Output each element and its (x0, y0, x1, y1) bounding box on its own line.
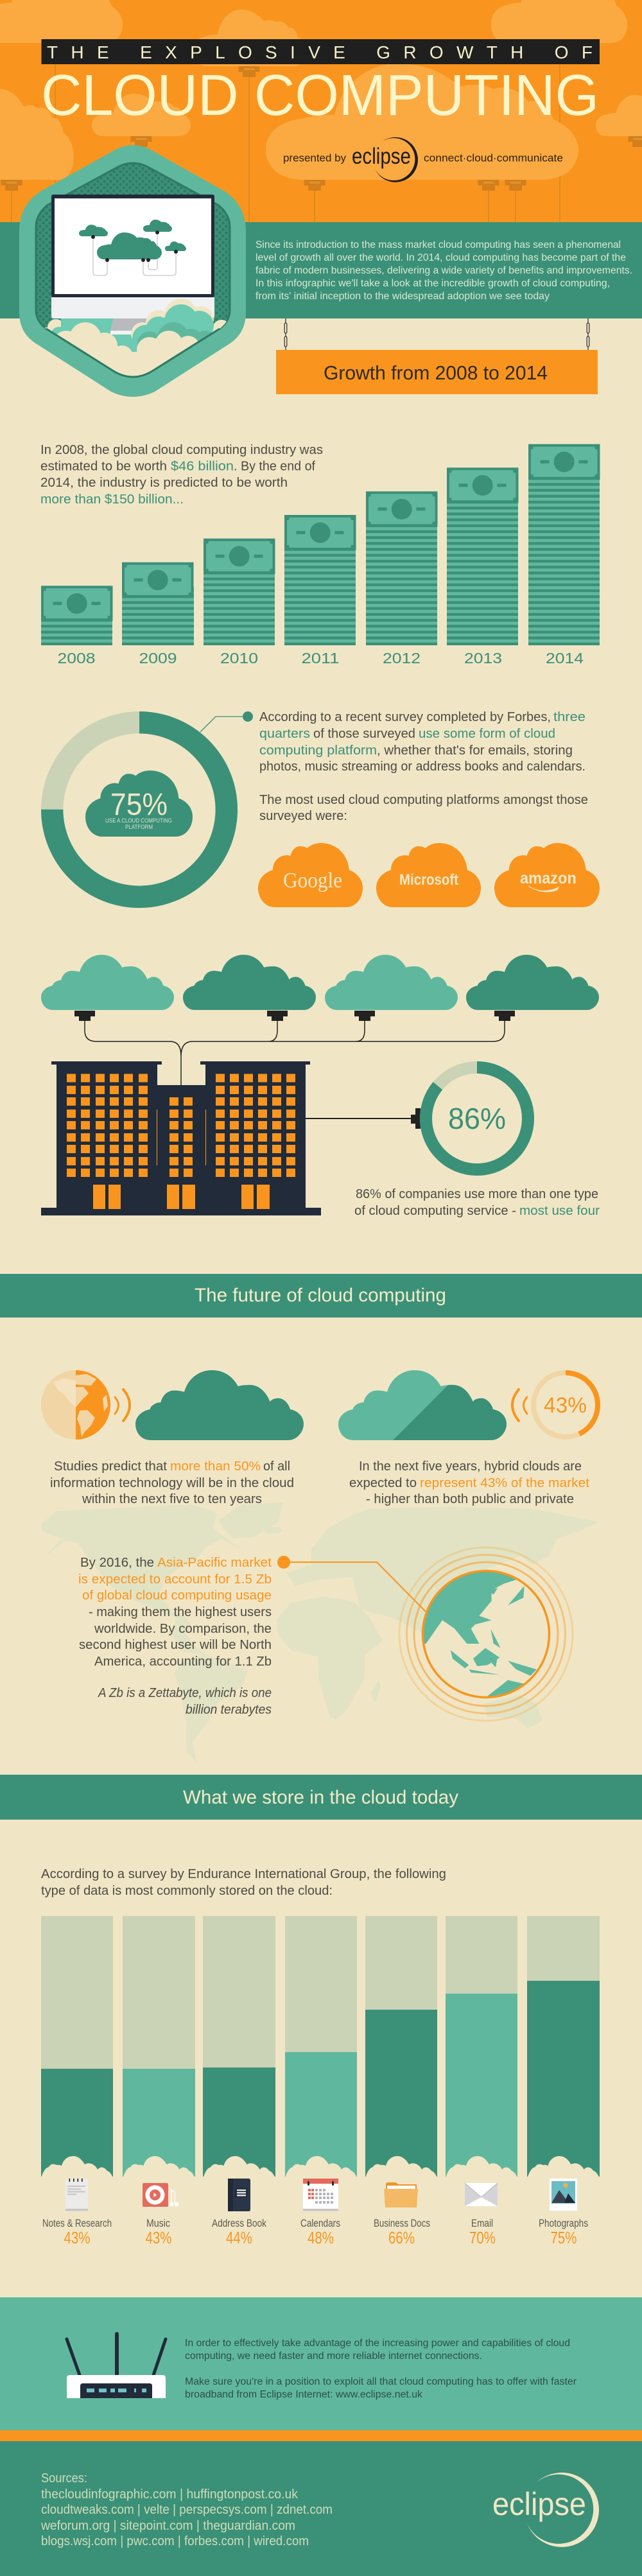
cloud connectors (1, 66, 642, 191)
text: more than 50%: more than 50% (170, 1459, 261, 1474)
icon: photograph (550, 2179, 577, 2211)
call to action text: In order to effectively take advantage of the increasing power and capabilities of cloud (185, 2338, 570, 2349)
bar percentages: 43% (64, 2228, 90, 2247)
cloud label: USE A CLOUD COMPUTING (105, 817, 172, 824)
bar percentages: 75% (551, 2228, 577, 2247)
growth text: $46 billion (171, 460, 234, 474)
icon: dark cloud (135, 1370, 304, 1440)
cloud: Google: Google (283, 869, 342, 892)
badge clouds (45, 299, 227, 376)
monitor (51, 195, 214, 318)
intro text: level of growth all over the world. In 2014, cloud computing has become part of the (256, 252, 626, 263)
text: more than 50%: within the next five to ten years (82, 1492, 262, 1506)
donut chart: 86%: 86% (448, 1102, 506, 1135)
bar percentages (64, 2228, 577, 2247)
stack 2012: 2012 (383, 650, 421, 666)
stack 2008: 2008 (58, 650, 95, 666)
86% caption: of cloud computing service - (354, 1204, 516, 1218)
asia-pacific text: America, accounting for 1.1 Zb (94, 1655, 272, 1669)
heading band: the future of cloud computing (0, 1274, 642, 1318)
badge outer hexagon (19, 145, 246, 397)
text: more than 50%: information technology will be in the cloud (50, 1476, 294, 1490)
bar labels: Music (146, 2217, 170, 2229)
stack 2011 (284, 515, 356, 666)
cloud label: PLATFORM (125, 824, 153, 831)
asia landmass (424, 1572, 537, 1696)
icon: email (465, 2183, 498, 2206)
screen wires (93, 232, 176, 275)
icon: folder (384, 2182, 418, 2207)
asia-pacific text: By 2016, the (80, 1556, 154, 1570)
intro text: Since its introduction to the mass market cloud computing has seen a phenomenal (256, 239, 621, 250)
stack 2013: 2013 (464, 650, 502, 666)
call to action text: computing, we need faster and more reliable internet connections. (185, 2351, 482, 2362)
asia-pacific text: worldwide. By comparison, the (94, 1622, 272, 1636)
signal arcs and 43% gauge (512, 1373, 598, 1437)
bar: notes & research (41, 1916, 113, 2178)
icon: router (67, 2334, 166, 2398)
call to action text: broadband from Eclipse Internet: www.eclipse.net.uk (185, 2389, 422, 2400)
text: hybrid clouds: represent 43% of the market (420, 1476, 589, 1490)
asia-pacific text: billion terabytes (186, 1703, 272, 1717)
icon: calendar (303, 2179, 338, 2211)
badge: monitor with clouds (19, 145, 246, 397)
asia-pacific text: is expected to account for 1.5 Zb (78, 1572, 272, 1587)
building doors (93, 1110, 270, 1209)
platform clouds (258, 843, 600, 907)
donut chart: 86% (426, 1067, 528, 1170)
network cables (85, 1021, 505, 1085)
bar labels: Notes & Research (42, 2217, 112, 2229)
heading band: the future of cloud computing: The future of cloud computing (195, 1285, 446, 1306)
presented by eclipse: connect·cloud·communicate (424, 152, 563, 164)
text: more than 50%: of all (263, 1459, 290, 1474)
stack 2014 (528, 444, 600, 666)
survey text: three (553, 710, 586, 724)
stack 2010 (204, 539, 275, 666)
bar percentages: 43% (145, 2228, 172, 2247)
stack 2011: 2011 (302, 650, 339, 666)
call to action text: Make sure you're in a position to exploit all that cloud computing has to offer with faster (185, 2376, 577, 2387)
survey text: , whether that's for emails, storing (377, 744, 573, 758)
stack 2010: 2010 (220, 650, 258, 666)
growth text: In 2008, the global cloud computing industry was (40, 443, 323, 457)
main title: CLOUD COMPUTING (41, 64, 599, 128)
survey text: According to a recent survey completed by Forbes, (259, 710, 551, 724)
asia-pacific text: of global cloud computing usage (82, 1588, 272, 1603)
sources: weforum.org | sitepoint.com | theguardian.com (40, 2519, 295, 2533)
icon: address book (228, 2179, 250, 2211)
intro text: from its' initial inception to the widespread adoption we see today (256, 291, 550, 302)
text: hybrid clouds: - higher than both public and private (366, 1492, 574, 1506)
survey intro text: type of data is most commonly stored on the cloud: (41, 1884, 333, 1898)
stack 2012 (366, 491, 438, 666)
bar labels: Calendars (300, 2217, 340, 2229)
86% caption (354, 1187, 600, 1218)
presented by eclipse: presented by (283, 152, 346, 164)
sources (40, 2471, 333, 2548)
asia-pacific globe with rings (399, 1547, 573, 1721)
cloud: Google (258, 843, 363, 907)
bar percentages: 48% (308, 2228, 334, 2247)
bar percentages: 66% (388, 2228, 415, 2247)
survey text: The most used cloud computing platforms amongst those (259, 793, 588, 807)
sources: Sources: (41, 2471, 87, 2485)
asia-pacific text: Asia-Pacific market (157, 1556, 272, 1570)
icon: music player (143, 2183, 178, 2207)
text: hybrid clouds (349, 1459, 589, 1506)
text: more than 50%: Studies predict that (54, 1459, 167, 1474)
presented by eclipse: eclipse (352, 144, 411, 169)
bar chart: money stacks (41, 444, 600, 666)
asia-pacific text: second highest user will be North (79, 1638, 272, 1652)
intro text (256, 239, 632, 302)
icon: hybrid cloud (338, 1370, 507, 1440)
bar: email (446, 1916, 517, 2178)
sources: thecloudinfographic.com | huffingtonpost.co.uk (41, 2487, 299, 2502)
stack 2014: 2014 (546, 650, 584, 666)
bar: address book (203, 1916, 275, 2178)
survey text: of those surveyed (313, 727, 415, 741)
screen clouds (79, 220, 186, 262)
four connected clouds (41, 955, 599, 1085)
leader line: asia-pacific (277, 1556, 426, 1612)
growth text: . By the end of (234, 460, 315, 474)
stack 2009: 2009 (139, 650, 177, 666)
survey text: surveyed were: (259, 809, 347, 823)
heading band: what we store (0, 1775, 642, 1820)
panel: footer (0, 2441, 642, 2576)
cable to donut (306, 1108, 421, 1129)
cloud: Microsoft (376, 843, 481, 907)
bar: business docs (365, 1916, 437, 2178)
survey text: use some form of cloud (419, 727, 555, 741)
cloud: amazon: amazon (520, 869, 577, 887)
bar labels: Address Book (212, 2217, 266, 2229)
bar percentages: 44% (226, 2228, 252, 2247)
cloud: amazon (494, 843, 600, 907)
panel: broadband call to action (0, 2297, 642, 2430)
intro text: fabric of modern businesses, delivering a wide variety of benefits and improvements. (256, 265, 632, 276)
sign: growth from 2008 to 2014: Growth from 2008 to 2014 (324, 361, 548, 384)
86% caption: most use four (519, 1204, 600, 1218)
icon: notes (65, 2179, 88, 2211)
presented by eclipse (283, 137, 563, 182)
growth text (40, 443, 323, 507)
windows (67, 1074, 295, 1177)
chains (284, 318, 589, 350)
bar labels (42, 2217, 588, 2229)
inner border line (46, 329, 220, 377)
sign: growth from 2008 to 2014 (276, 318, 598, 394)
survey text (259, 710, 588, 823)
text: more than 50% (50, 1459, 294, 1506)
asia-pacific text (78, 1556, 272, 1717)
stack 2009 (122, 562, 194, 666)
survey intro text (41, 1867, 446, 1898)
chart: cloud storage bars (41, 1916, 600, 2178)
growth text: more than $150 billion... (40, 492, 184, 507)
asia-pacific text: A Zb is a Zettabyte, which is one (98, 1686, 272, 1700)
leader line (200, 711, 253, 732)
orange divider (0, 2430, 642, 2441)
bar labels: Photographs (539, 2217, 588, 2229)
stack 2008 (41, 586, 113, 666)
stack 2013 (447, 467, 519, 666)
bar percentages: 70% (469, 2228, 496, 2247)
sources: blogs.wsj.com | pwc.com | forbes.com | wired.com (41, 2534, 309, 2548)
badge inner dotted panel (36, 163, 230, 377)
survey text: photos, music streaming or address books and calendars. (259, 760, 586, 774)
text: hybrid clouds: expected to (349, 1476, 417, 1490)
eclipse logo: eclipse (492, 2486, 586, 2522)
survey text: quarters (259, 727, 310, 741)
asia-pacific text: - making them the highest users (89, 1605, 272, 1619)
86% caption: 86% of companies use more than one type (356, 1187, 598, 1201)
growth text: 2014, the industry is predicted to be worth (40, 476, 288, 490)
sources: cloudtweaks.com | velte | perspecsys.com | zdnet.com (41, 2503, 333, 2517)
intro text: In this infographic we'll take a look at the incredible growth of cloud computing, (256, 278, 610, 289)
cloud label: 75% (110, 788, 168, 822)
cloud label (85, 770, 193, 837)
bar labels: Email (471, 2217, 493, 2229)
heading band: what we store: What we store in the cloud today (183, 1787, 458, 1808)
bar labels: Business Docs (374, 2217, 430, 2229)
text: hybrid clouds: In the next five years, hybrid clouds are (359, 1459, 582, 1474)
cable lines (12, 64, 560, 222)
intro band (0, 222, 642, 318)
donut chart: 75% (52, 722, 227, 897)
title bar: THE EXPLOSIVE GROWTH OF (47, 42, 593, 62)
cloud plugs (74, 1011, 515, 1021)
panel: orange header (0, 0, 642, 222)
signal arcs and 43% gauge: 43% (544, 1393, 587, 1418)
background clouds (0, 0, 642, 180)
office building (41, 1061, 321, 1215)
cloud: Microsoft: Microsoft (399, 871, 458, 889)
eclipse logo (492, 2473, 599, 2547)
title (41, 39, 600, 128)
world map (41, 1502, 598, 1762)
survey intro text: According to a survey by Endurance International Group, the following (41, 1867, 446, 1881)
icon: globe with signal (41, 1368, 130, 1442)
bar: music (123, 1916, 195, 2178)
growth text: estimated to be worth (40, 460, 167, 474)
bar: calendars (285, 1916, 357, 2178)
signal rings (399, 1547, 573, 1721)
call to action text (185, 2338, 577, 2400)
bar: photographs (527, 1916, 600, 2178)
survey text: computing platform (259, 744, 377, 758)
